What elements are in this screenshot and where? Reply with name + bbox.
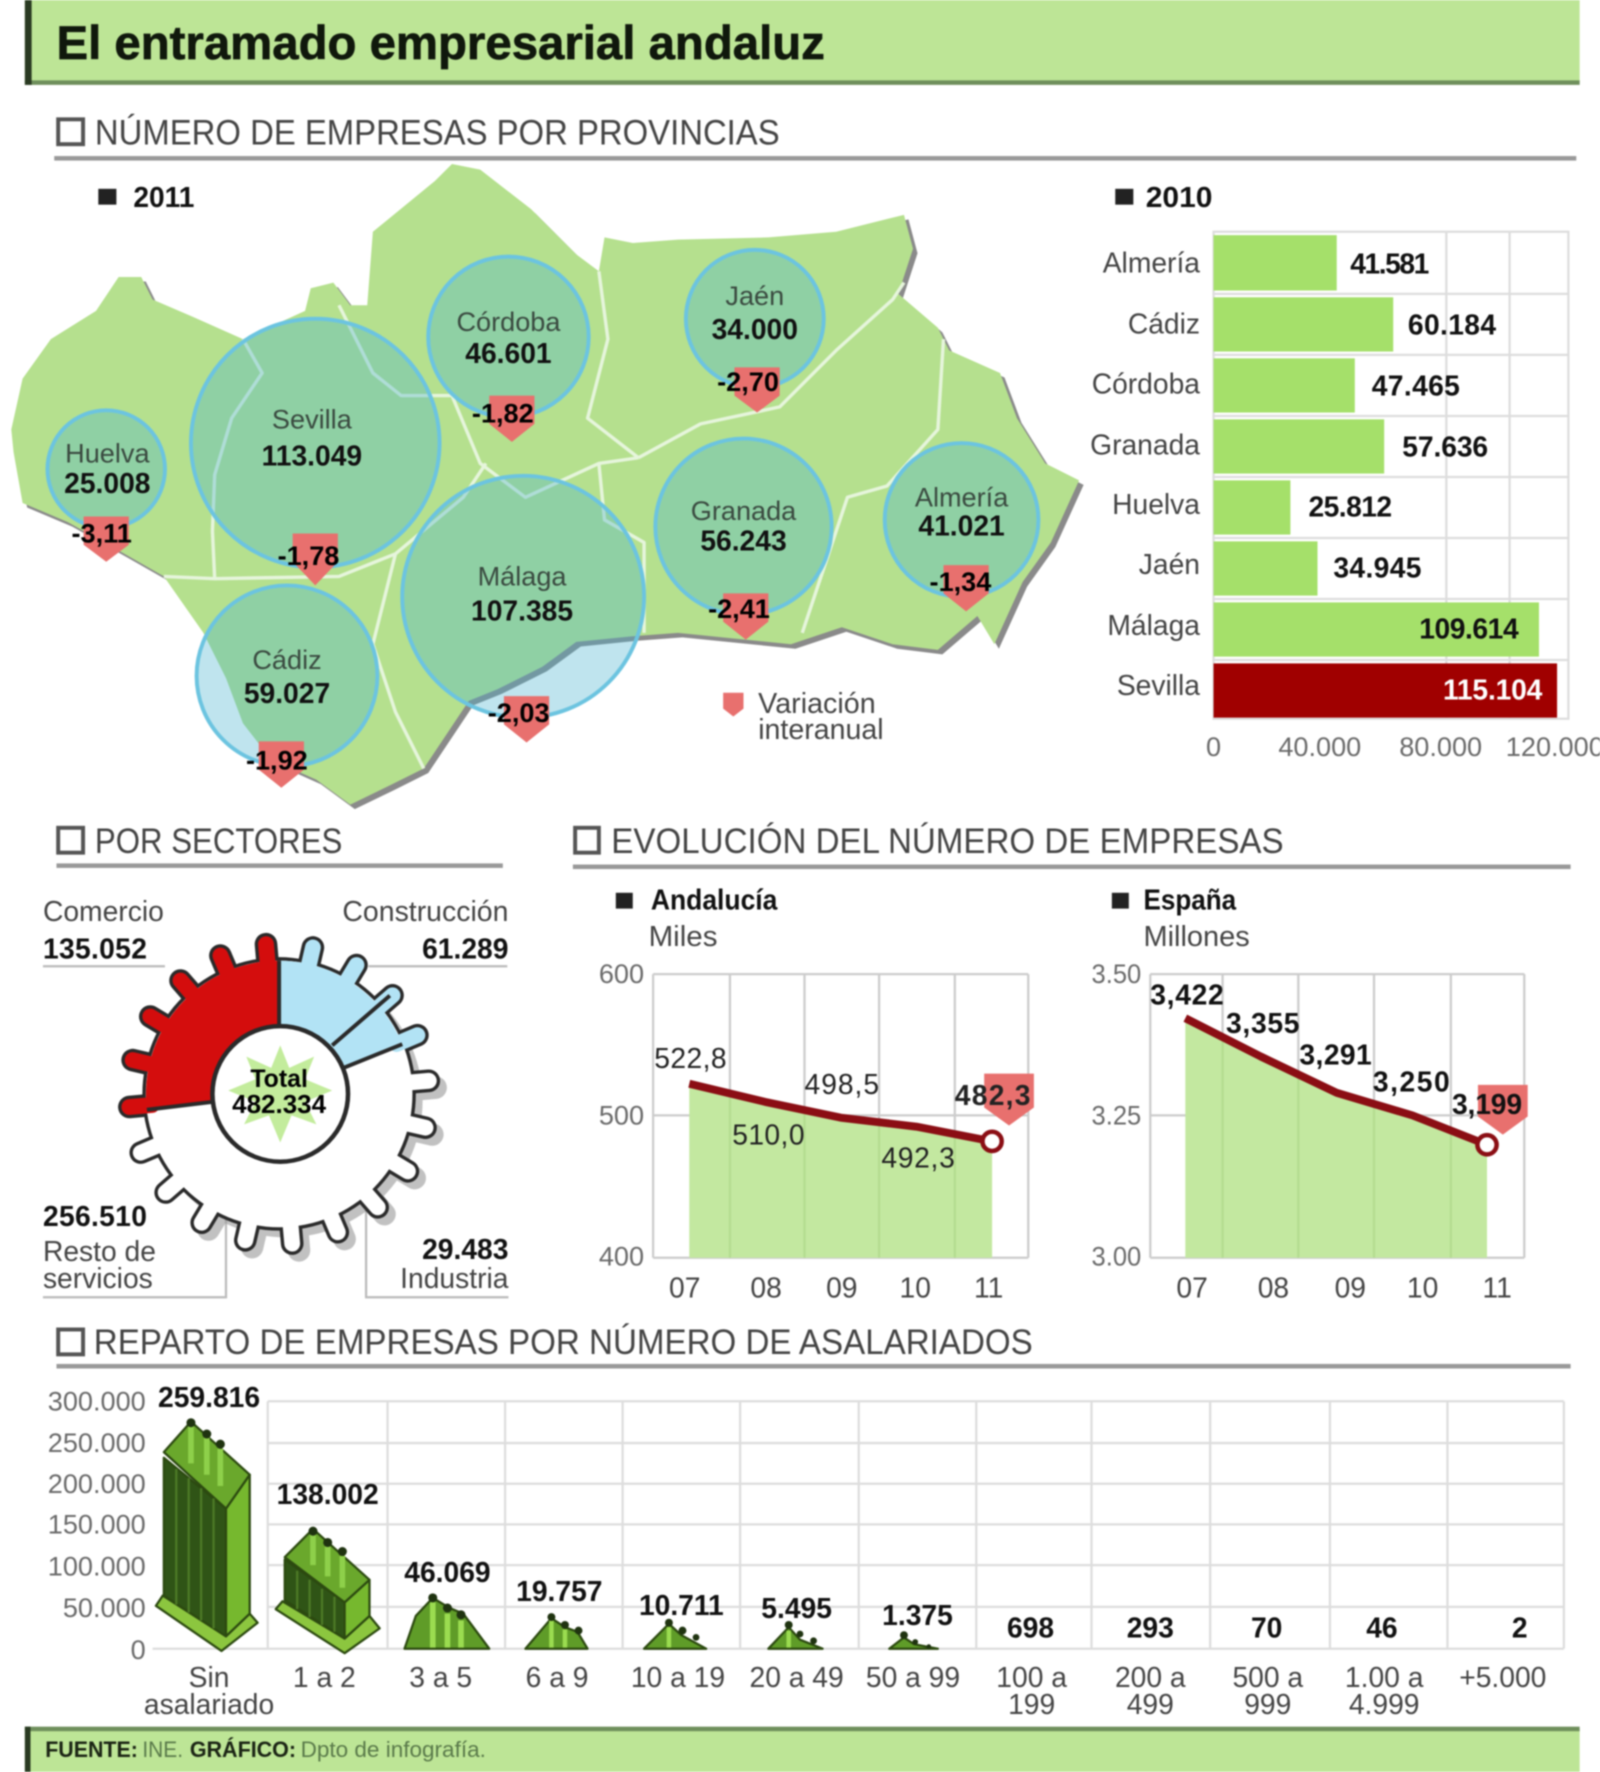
axis labels Andalucía: 11	[974, 1271, 1003, 1303]
axis labels España: 3.25	[1092, 1099, 1141, 1130]
province labels: Almería	[915, 481, 1009, 512]
bubble: Sevilla	[191, 319, 440, 567]
value labels Andalucía: 492,3	[881, 1141, 955, 1173]
category labels: 1.00 a	[1345, 1661, 1424, 1693]
province labels	[64, 280, 1009, 709]
category labels: 199	[1008, 1688, 1055, 1720]
label: comercio: Comercio	[43, 895, 164, 927]
axis labels España: 3.00	[1092, 1241, 1141, 1272]
marker: variation Andalucía	[984, 1074, 1034, 1126]
bar axis	[1206, 731, 1600, 762]
bar category labels: Sevilla	[1117, 669, 1200, 701]
panel: bar chart 2010	[1090, 181, 1600, 762]
label: industria	[400, 1233, 509, 1294]
label: resto de servicios: servicios	[43, 1262, 153, 1294]
value labels España: 3,250	[1373, 1066, 1450, 1098]
value labels España: 3,199	[1452, 1088, 1522, 1120]
line España	[1185, 1018, 1487, 1145]
bubble: Huelva	[47, 410, 165, 528]
bar values: 115.104	[1443, 674, 1543, 706]
value labels España: 3,422	[1150, 979, 1224, 1011]
bubble: Jaén	[686, 250, 824, 388]
value labels Andalucía	[654, 1042, 1031, 1173]
value labels: 1.375	[882, 1599, 953, 1631]
panel: employees chart	[48, 1381, 1564, 1720]
value labels España	[1150, 979, 1522, 1120]
bar chart subheading 2010	[1115, 181, 1212, 213]
variation values: -2,03	[488, 697, 550, 728]
legend: variación interanual: Variación	[758, 687, 876, 719]
heading: por sectores	[56, 822, 503, 868]
category labels: Sin	[189, 1661, 229, 1693]
title banner	[25, 0, 1580, 85]
y axis labels: 200.000	[48, 1468, 146, 1499]
label: comercio	[43, 895, 164, 964]
panel: line chart España: España	[1144, 884, 1236, 916]
icon: building 3 a 5	[405, 1593, 489, 1649]
axis labels España: 08	[1258, 1271, 1289, 1303]
panel: line chart Andalucía	[599, 884, 1034, 1303]
gear white segment: resto de servicios and industria	[141, 961, 429, 1244]
bars	[1214, 235, 1557, 718]
value labels Andalucía: 510,0	[732, 1119, 805, 1151]
axis labels Andalucía: 500	[599, 1099, 644, 1130]
province labels: Sevilla	[272, 403, 353, 434]
province labels: 34.000	[712, 313, 798, 345]
category labels: 4.999	[1349, 1688, 1420, 1720]
gear shadow	[149, 964, 436, 1250]
variation values: -2,41	[708, 593, 770, 624]
variation values: -2,70	[717, 366, 779, 397]
province labels: 25.008	[64, 467, 151, 499]
heading: evolución del número de empresas: EVOLUCIÓN DEL NÚMERO DE EMPRESAS	[611, 822, 1284, 861]
map subheading 2011: 2011	[133, 181, 194, 213]
label: construcción: Construcción	[342, 895, 508, 927]
category labels: asalariado	[144, 1688, 274, 1720]
gear outline	[129, 944, 429, 1244]
province labels: 41.021	[918, 510, 1005, 542]
axis labels Andalucía: 10	[900, 1271, 931, 1303]
value labels: 19.757	[516, 1575, 603, 1607]
category labels: 999	[1244, 1688, 1291, 1720]
axis labels Andalucía: 07	[669, 1271, 700, 1303]
value labels España: 3,355	[1226, 1007, 1299, 1039]
area under line	[689, 1084, 992, 1258]
province labels: 107.385	[471, 594, 573, 626]
variation values: -1,92	[246, 745, 308, 776]
axis labels Andalucía: 600	[599, 958, 644, 989]
axis labels España: 07	[1176, 1271, 1208, 1303]
bar category labels: Granada	[1090, 428, 1200, 460]
value labels: 293	[1127, 1611, 1174, 1643]
area under line España	[1185, 1018, 1487, 1258]
variation values: -1,82	[472, 398, 534, 429]
category labels: 3 a 5	[409, 1661, 472, 1693]
panel: gear chart por sectores	[43, 895, 509, 1297]
category labels: 50 a 99	[866, 1661, 960, 1693]
bar axis: 0	[1206, 731, 1221, 762]
value labels: 698	[1007, 1611, 1054, 1643]
province labels: 46.601	[465, 337, 552, 369]
label: industria: Industria	[400, 1262, 509, 1294]
bar category labels: Jaén	[1139, 548, 1200, 580]
variation markers	[84, 367, 989, 788]
province labels: Córdoba	[456, 306, 561, 337]
province labels: Málaga	[478, 560, 567, 591]
bubble: Almería	[885, 443, 1038, 597]
axis labels España: 10	[1407, 1271, 1438, 1303]
value labels: 259.816	[158, 1381, 260, 1413]
category labels: 200 a	[1115, 1661, 1186, 1693]
y axis labels: 50.000	[63, 1592, 146, 1623]
category labels: 500 a	[1232, 1661, 1303, 1693]
icon: building 50 a 99	[889, 1631, 938, 1649]
province labels: 56.243	[700, 524, 787, 556]
icon: building 6 a 9	[525, 1613, 588, 1649]
label: construcción: 61.289	[422, 932, 508, 964]
gear segment: construcción	[279, 947, 417, 1094]
panel: map of provinces	[11, 164, 1084, 809]
value labels: 46.069	[404, 1556, 491, 1588]
label: resto de servicios: 256.510	[43, 1200, 147, 1232]
bar values: 60.184	[1408, 309, 1496, 341]
legend: variación interanual: interanual	[758, 713, 884, 745]
province labels: Huelva	[65, 437, 150, 468]
variation values: -1,78	[278, 540, 339, 571]
value labels: 70	[1251, 1611, 1282, 1643]
variation values	[72, 366, 991, 776]
y axis labels: 0	[131, 1634, 146, 1665]
category labels: 6 a 9	[526, 1661, 588, 1693]
category labels: 100 a	[996, 1661, 1067, 1693]
gear centre: total: 482.334	[232, 1089, 327, 1119]
bar values: 47.465	[1372, 370, 1460, 402]
variation values: -3,11	[72, 517, 132, 548]
value labels: 46	[1366, 1611, 1398, 1643]
label: resto de servicios: Resto de	[43, 1235, 156, 1267]
bar chart subheading 2010: 2010	[1146, 181, 1212, 213]
panel: line chart España: Millones	[1144, 920, 1250, 952]
bar values: 109.614	[1419, 613, 1519, 645]
value labels Andalucía: 498,5	[805, 1068, 879, 1100]
icon: building 10 a 19	[644, 1619, 706, 1649]
end point Andalucía	[982, 1132, 1002, 1151]
bar category labels: Cádiz	[1128, 307, 1200, 339]
map subheading 2011	[98, 181, 194, 213]
y axis labels: 250.000	[48, 1427, 146, 1458]
axis labels España	[1092, 958, 1512, 1303]
bubble: Cádiz	[197, 585, 377, 766]
value labels Andalucía: 482,3	[955, 1079, 1031, 1111]
heading: número de empresas por provincias	[54, 114, 1576, 161]
value labels: 10.711	[639, 1589, 724, 1621]
category labels: 499	[1127, 1688, 1174, 1720]
bar category labels: Huelva	[1112, 488, 1200, 520]
title banner: El entramado empresarial andaluz	[56, 17, 825, 70]
value labels	[158, 1381, 1528, 1643]
heading: reparto de empresas: REPARTO DE EMPRESAS POR NÚMERO DE ASALARIADOS	[94, 1323, 1033, 1362]
footer source bar	[25, 1727, 1580, 1772]
province labels: Jaén	[725, 280, 784, 311]
category labels: +5.000	[1459, 1661, 1546, 1693]
bubble: Granada	[655, 439, 832, 615]
category labels: 10 a 19	[631, 1661, 725, 1693]
footer source bar: INE.	[142, 1737, 183, 1762]
category labels	[144, 1661, 1546, 1720]
label: construcción	[342, 895, 508, 964]
variation values: -1,34	[930, 566, 991, 597]
bar category labels	[1090, 246, 1200, 701]
label: comercio: 135.052	[43, 932, 147, 964]
gear centre: total	[212, 1026, 348, 1162]
bar category labels: Málaga	[1107, 609, 1200, 641]
axis labels Andalucía	[599, 958, 1003, 1303]
heading: por sectores: POR SECTORES	[95, 822, 342, 861]
bar values: 57.636	[1402, 431, 1488, 463]
icon: building 1 a 2	[276, 1527, 380, 1653]
category labels: 1 a 2	[293, 1661, 356, 1693]
marker: variation España	[1478, 1085, 1528, 1135]
value labels: 2	[1512, 1611, 1528, 1643]
province labels: 59.027	[244, 677, 330, 709]
bar category labels: Córdoba	[1092, 367, 1200, 399]
value labels: 138.002	[277, 1478, 379, 1510]
panel: line chart España	[1092, 884, 1528, 1303]
province labels: Granada	[691, 495, 797, 526]
gear segment dividers	[147, 961, 402, 1110]
bar values	[1308, 248, 1543, 706]
end point España	[1477, 1135, 1497, 1154]
heading: evolución del número de empresas	[573, 822, 1571, 869]
axis labels España: 3.50	[1092, 958, 1141, 989]
province labels: Cádiz	[252, 644, 322, 675]
bar category labels: Almería	[1103, 246, 1200, 278]
heading: número de empresas por provincias: NÚMERO DE EMPRESAS POR PROVINCIAS	[95, 114, 780, 153]
value labels: 5.495	[761, 1592, 832, 1624]
bar values: 41.581	[1350, 248, 1429, 280]
value labels España: 3,291	[1299, 1039, 1372, 1071]
label: resto de servicios	[43, 1200, 156, 1294]
y axis labels: 300.000	[48, 1385, 146, 1416]
footer source bar: Dpto de infografía.	[301, 1737, 486, 1762]
icon: building 20 a 49	[768, 1621, 823, 1649]
panel: line chart Andalucía: Miles	[649, 920, 718, 952]
category labels: 20 a 49	[750, 1661, 844, 1693]
value labels Andalucía: 522,8	[654, 1042, 727, 1074]
y axis labels: 100.000	[48, 1550, 146, 1581]
panel: line chart Andalucía: Andalucía	[651, 884, 778, 916]
map shape of Andalucía	[11, 164, 1084, 809]
label: industria: 29.483	[422, 1233, 508, 1265]
bubble: Málaga	[402, 476, 644, 718]
bubble: Córdoba	[428, 257, 589, 417]
bar axis: 80.000	[1399, 731, 1482, 762]
footer source bar: FUENTE:	[45, 1737, 138, 1762]
legend: variación interanual	[723, 687, 884, 745]
y axis labels: 150.000	[48, 1508, 146, 1539]
axis labels Andalucía: 09	[826, 1271, 858, 1303]
bar values: 25.812	[1308, 491, 1392, 523]
heading: reparto de empresas	[56, 1323, 1571, 1368]
gear segment: comercio	[129, 944, 279, 1110]
province labels: 113.049	[262, 440, 362, 472]
gear centre: total: Total	[250, 1066, 308, 1093]
axis labels Andalucía: 400	[599, 1241, 644, 1272]
axis labels España: 11	[1483, 1271, 1512, 1303]
bar axis: 40.000	[1278, 731, 1361, 762]
axis labels España: 09	[1335, 1271, 1366, 1303]
icon: building sin asalariado	[156, 1418, 258, 1651]
footer source bar: GRÁFICO:	[190, 1737, 296, 1762]
y axis labels	[48, 1385, 146, 1665]
bar values: 34.945	[1333, 552, 1421, 584]
line Andalucía	[689, 1084, 992, 1141]
axis labels Andalucía: 08	[750, 1271, 782, 1303]
